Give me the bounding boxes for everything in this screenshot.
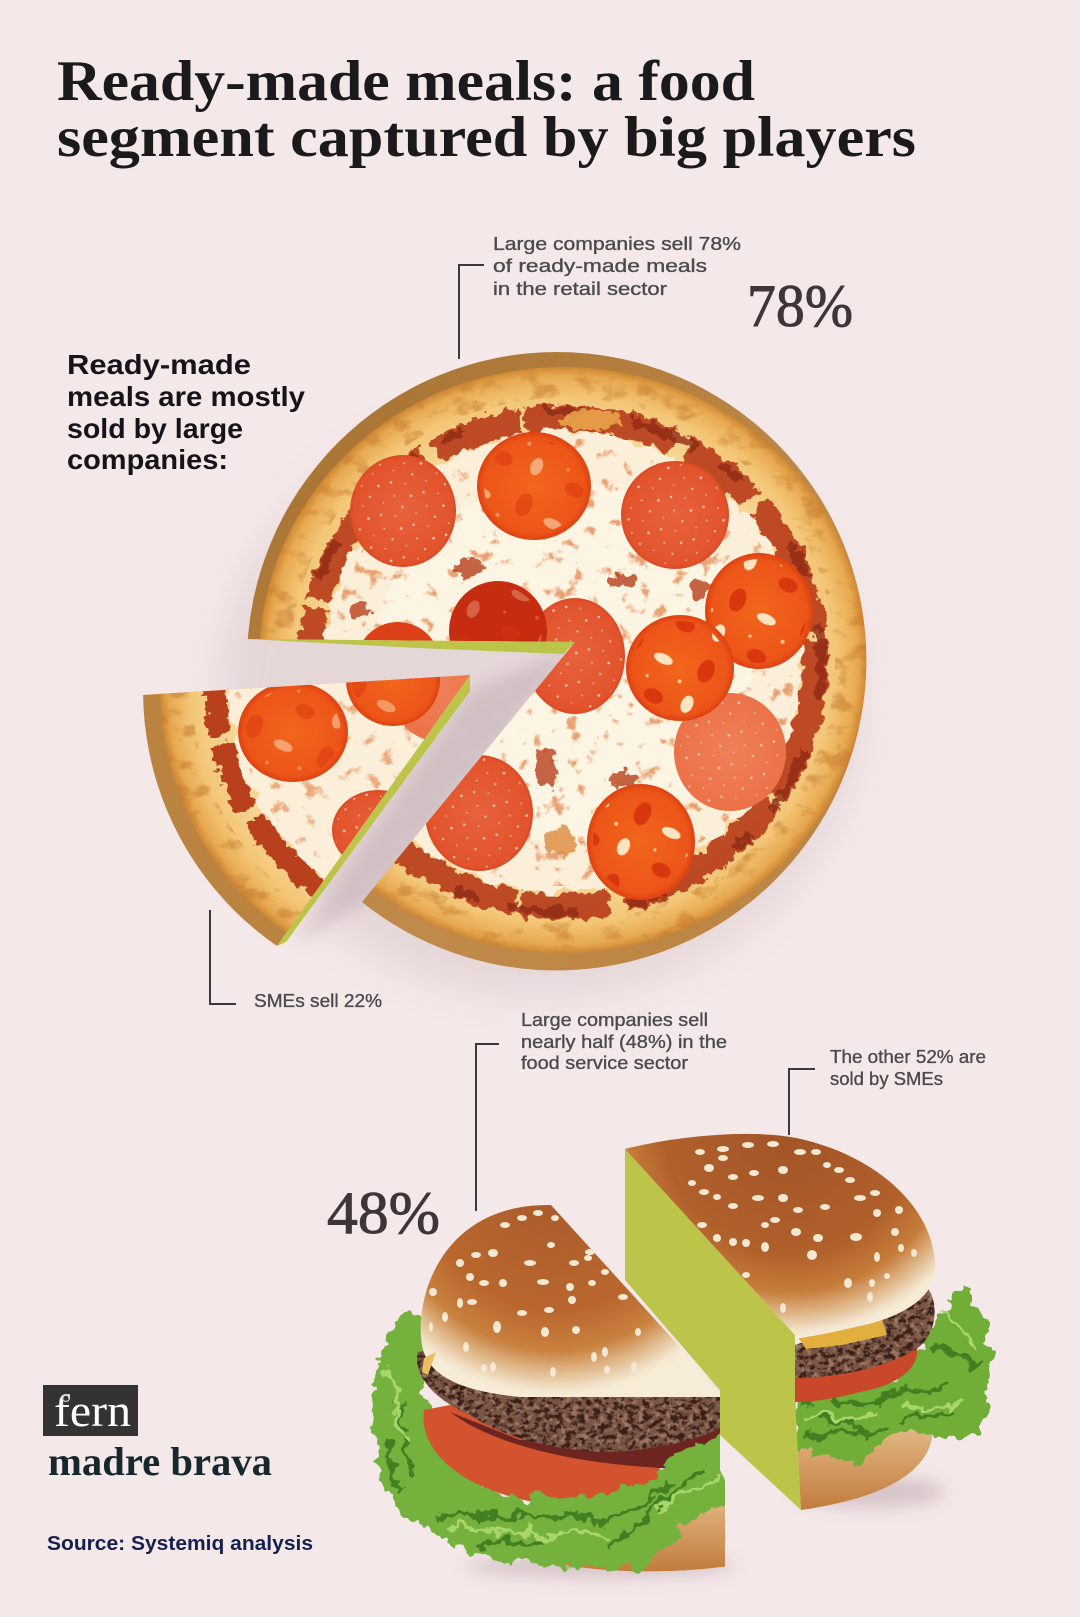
callout: other 52% SMEs: The other 52% are [830, 1046, 986, 1067]
logo: fern: fern [54, 1385, 131, 1436]
callout: large companies retail: of ready-made meals [493, 255, 707, 276]
subheading: ready-made meals: Ready-made [67, 349, 251, 380]
green cut edge: slice [277, 675, 470, 946]
callout: large companies retail [459, 233, 741, 359]
title: segment captured by big players [57, 106, 916, 169]
callout: other 52% SMEs [789, 1046, 986, 1135]
pepperoni slices [350, 455, 786, 871]
sauce splodges on cheese [350, 410, 708, 856]
slice toppings [238, 675, 470, 855]
sesame seeds [429, 1210, 641, 1377]
burger: large companies portion [373, 1205, 735, 1571]
callout: SMEs 22%: SMEs sell 22% [254, 990, 382, 1011]
callout: large companies retail: in the retail sector [493, 278, 667, 299]
pizza: large companies share [247, 352, 870, 972]
title [57, 50, 916, 169]
subheading: ready-made meals [67, 349, 306, 475]
callout: large companies retail: Large companies sell 78% [493, 233, 741, 254]
green cut edge: pizza [247, 639, 575, 654]
tomato slices [356, 432, 813, 900]
burger: SMEs portion [625, 1134, 992, 1510]
callout: other 52% SMEs: sold by SMEs [830, 1068, 943, 1089]
subheading: ready-made meals: sold by large [67, 413, 243, 444]
callout: large companies food service: nearly half (48%) in the [521, 1031, 727, 1052]
title: Ready-made meals: a food [57, 50, 755, 113]
sesame seeds [688, 1141, 917, 1313]
callout: large companies food service [476, 1009, 727, 1211]
green cut face: burger [625, 1149, 801, 1510]
callout: large companies food service: food service sector [521, 1052, 688, 1073]
subheading: ready-made meals: meals are mostly [67, 381, 306, 412]
stat: 48%: 48% [327, 1180, 440, 1246]
stat: 78%: 78% [747, 273, 853, 339]
front lettuce [430, 1437, 735, 1570]
burger shadows [465, 1476, 945, 1578]
logo: madre brava: madre brava [48, 1439, 272, 1484]
pizza slice: SMEs share [143, 675, 470, 946]
source: Source: Systemiq analysis [47, 1533, 313, 1555]
callout: SMEs 22% [210, 910, 382, 1011]
subheading: ready-made meals: companies: [67, 444, 228, 475]
callout: large companies food service: Large companies sell [521, 1009, 708, 1030]
pizza shadow [220, 405, 860, 995]
